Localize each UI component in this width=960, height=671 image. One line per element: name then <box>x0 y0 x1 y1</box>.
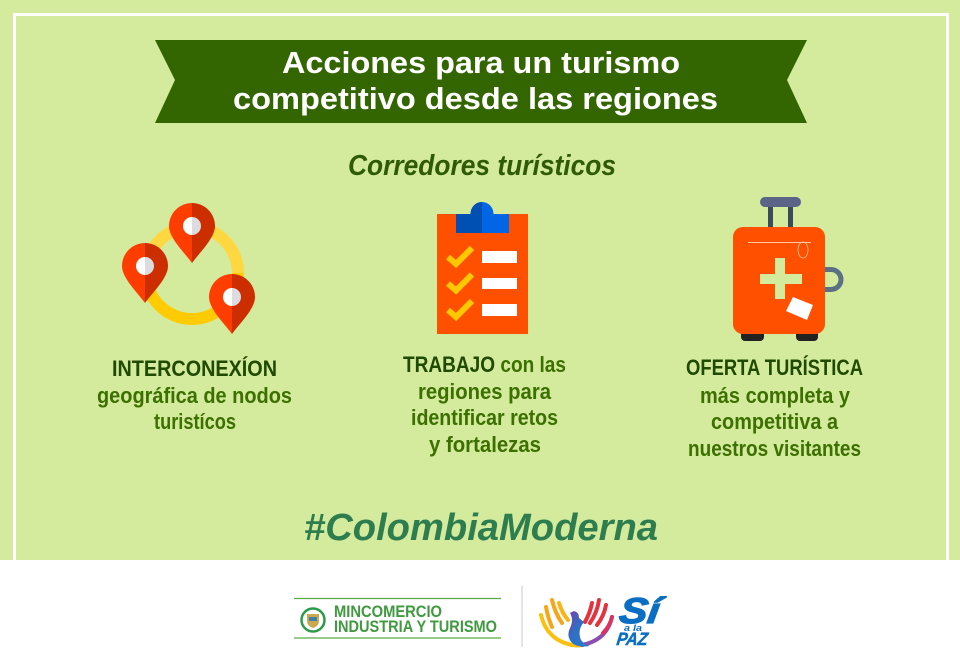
text: trabajo: regiones para <box>418 379 552 404</box>
logo: Sí a la Paz: a la <box>624 623 642 633</box>
text: trabajo: TRABAJO con las <box>403 352 566 377</box>
title banner: Acciones para un turismo <box>282 45 680 80</box>
subtitle: Corredores turísticos <box>348 150 616 182</box>
logo: Mincomercio: MINCOMERCIO <box>334 602 442 621</box>
text: trabajo: identificar retos <box>411 405 558 430</box>
logo: Sí a la Paz <box>541 590 667 649</box>
title banner: competitivo desde las regiones <box>233 81 718 116</box>
title banner <box>155 40 807 123</box>
text: interconexión <box>97 356 292 434</box>
text: trabajo: y fortalezas <box>429 432 541 457</box>
divider <box>521 586 523 647</box>
white frame <box>14 14 948 560</box>
logo: Mincomercio <box>294 598 501 638</box>
icon: clipboard checklist <box>437 202 528 334</box>
text: interconexión: geográfica de nodos <box>97 383 292 408</box>
text: interconexión: turistícos <box>154 409 236 434</box>
text: oferta turística: nuestros visitantes <box>688 436 861 461</box>
icon: map pins on a ring <box>122 203 255 334</box>
text: trabajo <box>403 352 566 457</box>
text: interconexión: INTERCONEXÍON <box>112 356 277 381</box>
logo: Mincomercio: INDUSTRIA Y TURISMO <box>334 617 497 636</box>
text: oferta turística: competitiva a <box>711 409 839 434</box>
text: oferta turística: más completa y <box>700 383 851 408</box>
hashtag: #ColombiaModerna <box>304 507 658 549</box>
logo: Sí a la Paz: Sí <box>617 590 667 631</box>
icon: suitcase <box>733 197 841 341</box>
logo: Sí a la Paz: PAZ <box>615 629 650 649</box>
text: oferta turística <box>686 355 863 461</box>
text: oferta turística: OFERTA TURÍSTICA <box>686 355 863 380</box>
